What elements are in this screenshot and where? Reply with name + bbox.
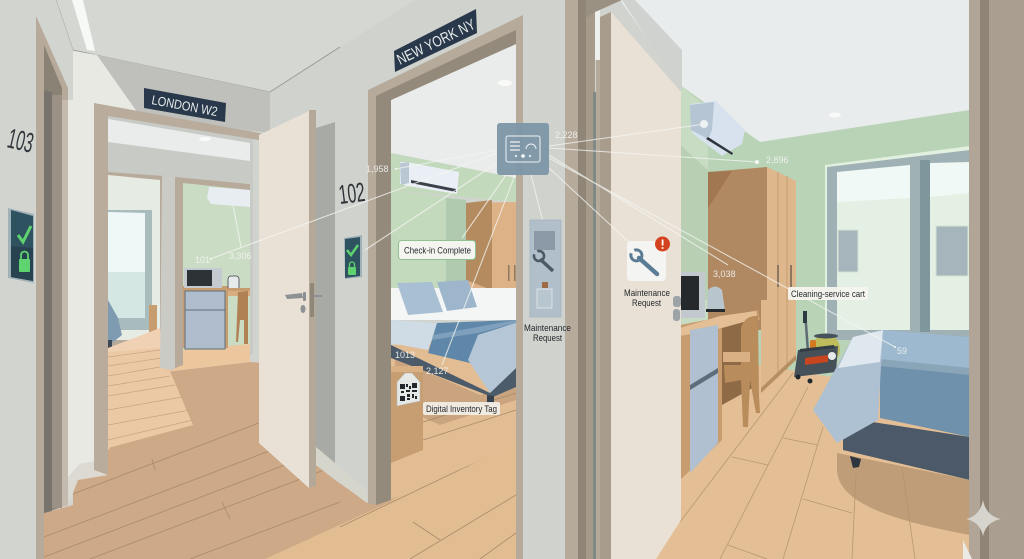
- QR inventory tag: [397, 373, 420, 406]
- cleaning-service cart label: Cleaning-service cart: [791, 289, 865, 300]
- metric values: 1,958: [366, 164, 389, 174]
- london room interior: [108, 115, 253, 450]
- london door sign: LONDON W2: [150, 92, 219, 119]
- label: maintenance request on panel: Request: [533, 333, 562, 344]
- london door sign: [144, 88, 226, 122]
- central control hub icon: [497, 123, 549, 175]
- check-in complete label: Check-in Complete: [404, 246, 471, 256]
- sparkle icon: [966, 500, 1001, 536]
- door number 102: 102: [337, 177, 367, 210]
- room wall with new york door: [270, 0, 570, 559]
- metric values: 59: [897, 346, 907, 356]
- wardrobe: [708, 167, 796, 393]
- microwave: [680, 272, 705, 318]
- smart lock 102: [344, 235, 362, 279]
- label: maintenance request on panel: Maintenance: [524, 323, 571, 334]
- metric values: [195, 130, 907, 376]
- left wall with door 103: [0, 0, 73, 559]
- desk and chair: [680, 310, 760, 480]
- label: maintenance request by icon: [624, 288, 670, 309]
- metric values: 3,306: [229, 251, 252, 261]
- check-in complete label: [398, 240, 476, 260]
- door number 103: 103: [5, 123, 37, 159]
- label: maintenance request on panel: [524, 323, 571, 344]
- door hardware: [673, 296, 681, 321]
- right foreground door frame: [963, 0, 1024, 559]
- label: maintenance request by icon: Request: [632, 298, 661, 309]
- label: maintenance request by icon: Maintenance: [624, 288, 670, 299]
- new york door frame: [368, 15, 523, 559]
- metric values: 2,127: [426, 366, 449, 376]
- maintenance wall panel: [530, 220, 561, 317]
- metric values: 3,038: [713, 269, 736, 279]
- metric values: 101: [195, 255, 210, 265]
- open door london: [259, 110, 322, 488]
- air conditioner right room: [690, 101, 745, 156]
- connection lines: [210, 124, 895, 365]
- maintenance request icon: [627, 236, 670, 281]
- data point dots: [210, 160, 896, 348]
- big open door: [595, 0, 682, 559]
- metric values: 1013: [395, 350, 415, 360]
- metric values: 2,896: [766, 155, 789, 165]
- digital inventory tag label: Digital Inventory Tag: [426, 404, 497, 415]
- right room interior: [620, 0, 970, 559]
- hallway ceiling: [56, 0, 415, 92]
- air conditioner new york room: [400, 162, 459, 194]
- new york door sign: NEW YORK NY: [394, 16, 478, 68]
- new york room interior: [390, 44, 516, 500]
- metric values: 2,228: [555, 130, 578, 140]
- smart lock 103: [8, 208, 34, 283]
- door frame beside big door: [565, 0, 622, 559]
- right bed: [813, 330, 970, 480]
- hallway floor: [44, 362, 520, 559]
- cleaning cart: [794, 311, 840, 384]
- london door side wall: [68, 51, 270, 503]
- cardboard box: [391, 366, 423, 463]
- kettle: [706, 286, 725, 312]
